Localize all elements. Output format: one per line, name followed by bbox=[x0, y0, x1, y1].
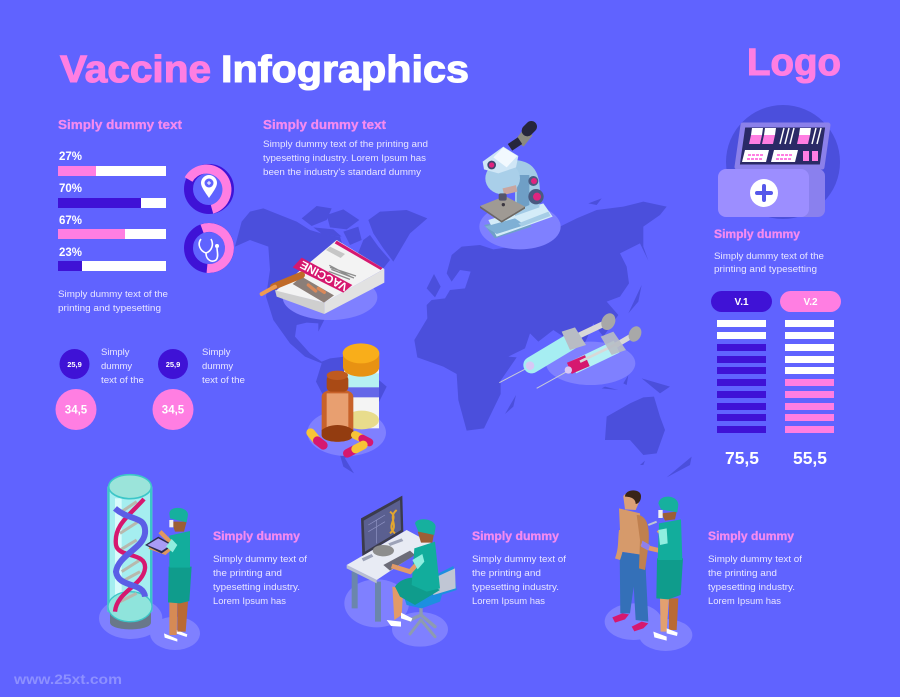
text block: center intro: Simply dummy text bbox=[263, 117, 387, 132]
text block: printing and typesetting bbox=[58, 289, 168, 314]
comparison chart: V.2 column: 55,5 bbox=[793, 448, 827, 468]
title: Infographics bbox=[221, 49, 469, 91]
text block: computer analysis bbox=[472, 531, 566, 607]
bar 67% bbox=[58, 215, 166, 239]
text block: DNA research: Simply dummy text of bbox=[213, 554, 307, 565]
text block: vaccination bbox=[708, 531, 802, 607]
stat group 1: Simply bbox=[101, 347, 130, 358]
stat group 1: text of the bbox=[101, 375, 144, 386]
text block: center intro: Simply dummy text of the printing and bbox=[263, 139, 428, 150]
illustration: nurse vaccinating patient bbox=[605, 490, 692, 651]
bar 27%: 27% bbox=[59, 151, 82, 163]
icon: pill bottles bbox=[307, 343, 386, 456]
text block: right panel bbox=[714, 229, 824, 275]
icon: medical kit bbox=[718, 105, 840, 219]
text block: vaccination: Simply dummy bbox=[708, 531, 795, 543]
text block: right panel: Simply dummy bbox=[714, 229, 801, 241]
comparison chart: V.1 column bbox=[711, 291, 772, 468]
bar 27% bbox=[58, 151, 166, 176]
stat group 2: 34,5 bbox=[162, 404, 185, 416]
stat group 2: text of the bbox=[202, 375, 245, 386]
text block: DNA research: Lorem Ipsum has bbox=[213, 596, 286, 607]
text block: computer analysis: Lorem Ipsum has bbox=[472, 596, 545, 607]
comparison chart: V.1 column: 75,5 bbox=[725, 448, 759, 468]
illustration: DNA tube and nurse bbox=[99, 475, 200, 650]
text block: right panel: printing and typesetting bbox=[714, 264, 817, 275]
text block: printing and typesetting: Simply dummy text of the bbox=[58, 289, 168, 300]
bar 23% bbox=[58, 247, 166, 271]
stat group 2: 25,9 bbox=[166, 360, 180, 369]
text block: vaccination: Simply dummy text of bbox=[708, 554, 802, 565]
text block: computer analysis: the printing and bbox=[472, 568, 541, 579]
stat group 1: 25,9 bbox=[67, 360, 82, 369]
text block: right panel: Simply dummy text of the bbox=[714, 251, 824, 262]
text block: computer analysis: Simply dummy text of bbox=[472, 554, 566, 565]
bar 70%: 70% bbox=[59, 183, 82, 195]
text block: DNA research: the printing and bbox=[213, 568, 282, 579]
comparison chart: V.1 column: V.1 bbox=[734, 297, 749, 308]
stat group 2 bbox=[152, 347, 245, 430]
comparison chart: V.2 column: V.2 bbox=[803, 297, 818, 308]
title bbox=[60, 49, 469, 91]
kit box bbox=[718, 169, 825, 217]
text block: DNA research: Simply dummy bbox=[213, 531, 301, 543]
text block: computer analysis: typesetting industry. bbox=[472, 582, 559, 593]
stat group 2: dummy bbox=[202, 361, 233, 372]
text block: DNA research bbox=[213, 531, 307, 607]
text block: vaccination: Lorem Ipsum has bbox=[708, 596, 781, 607]
text block: center intro bbox=[263, 117, 428, 178]
text block: DNA research: typesetting industry. bbox=[213, 582, 300, 593]
title: Vaccine bbox=[60, 49, 211, 91]
icon: microscope bbox=[479, 127, 561, 249]
donut: stethoscope bbox=[188, 227, 230, 268]
logo: Logo bbox=[747, 42, 841, 84]
text block: center intro: typesetting industry. Lorem Ipsum has bbox=[263, 153, 426, 164]
panel: progress bars bbox=[58, 117, 183, 271]
stat group 1: 34,5 bbox=[65, 404, 88, 416]
kit tray bbox=[737, 125, 828, 167]
bar 67%: 67% bbox=[59, 215, 82, 227]
donut: location pin bbox=[188, 168, 230, 210]
icon: vaccine box: VACCINE bbox=[298, 258, 350, 293]
icon: syringes bbox=[499, 311, 644, 388]
icon: vaccine box bbox=[262, 240, 384, 320]
stat group 1: dummy bbox=[101, 361, 132, 372]
text block: vaccination: typesetting industry. bbox=[708, 582, 795, 593]
bar 70% bbox=[58, 183, 166, 208]
stat group 2: Simply bbox=[202, 347, 231, 358]
heading: Simply dummy text bbox=[58, 117, 183, 132]
watermark: www.25xt.com bbox=[13, 671, 122, 687]
stat group 1 bbox=[56, 347, 144, 430]
text block: vaccination: the printing and bbox=[708, 568, 777, 579]
text block: center intro: been the industry's standard dummy bbox=[263, 167, 421, 178]
comparison chart: V.2 column bbox=[780, 291, 841, 468]
world map bbox=[235, 198, 692, 477]
bar 23%: 23% bbox=[59, 247, 82, 259]
text block: printing and typesetting: printing and typesetting bbox=[58, 303, 161, 314]
text block: computer analysis: Simply dummy bbox=[472, 531, 560, 543]
illustration: researcher at computer bbox=[344, 496, 457, 647]
